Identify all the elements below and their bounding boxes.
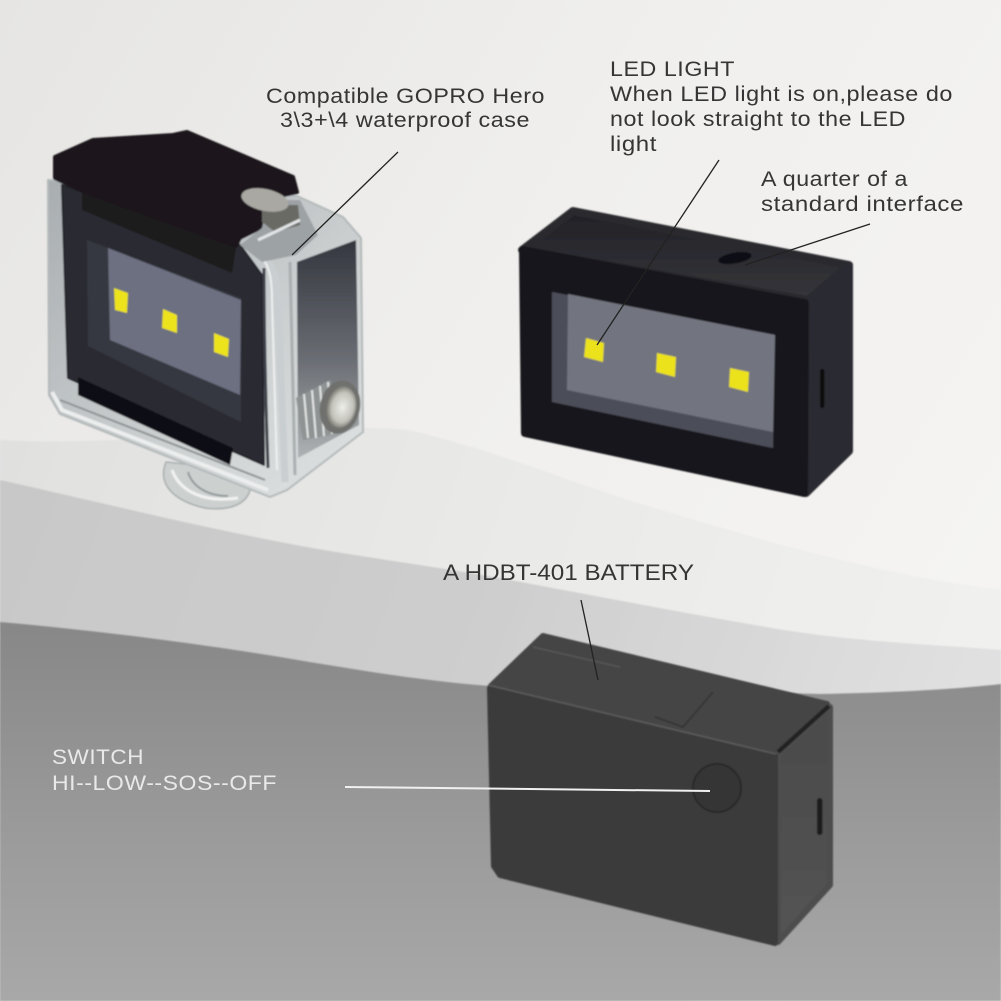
icon: led 3 [214, 333, 229, 357]
edge highlight [488, 685, 776, 754]
light panel [108, 248, 241, 395]
label: quarter interface: standard interface [761, 193, 964, 216]
clear housing [48, 180, 363, 497]
front dark body [62, 185, 264, 465]
label: compatible case [266, 85, 545, 132]
leader line: quarter interface [745, 224, 870, 265]
leader line: led [597, 160, 719, 345]
side button [296, 376, 365, 440]
icon: switch button [693, 764, 741, 812]
label: led light [610, 58, 953, 156]
icon: led 1 [584, 338, 604, 362]
leader line: case [292, 152, 398, 255]
icon: mounting foot [164, 462, 250, 509]
panel surround [87, 240, 241, 422]
label: led light: not look straight to the LED [610, 108, 906, 131]
top face [522, 211, 849, 300]
label: compatible case: 3\3+\4 waterproof case [280, 109, 530, 132]
product: waterproof case with LED light [48, 132, 365, 509]
icon: led 3 [729, 368, 749, 392]
right face [806, 266, 849, 493]
front face [523, 250, 805, 493]
label: switch: HI--LOW--SOS--OFF [52, 772, 277, 795]
label: led light: light [610, 133, 657, 156]
screen surround [552, 292, 775, 448]
product: battery unit [488, 636, 830, 943]
label: compatible case: Compatible GOPRO Hero [266, 85, 545, 108]
icon: led 1 [114, 288, 128, 313]
label: switch: SWITCH [52, 746, 144, 769]
top latch [239, 184, 318, 262]
label: led light: When LED light is on,please do [610, 83, 953, 106]
label: quarter interface [761, 168, 964, 216]
battery tab [655, 692, 713, 727]
ridge line [533, 647, 620, 667]
label: switch [52, 746, 277, 795]
leader line: switch [345, 787, 710, 791]
label: battery: A HDBT-401 BATTERY [443, 560, 694, 585]
gasket rim [250, 248, 285, 482]
right side window [297, 240, 359, 458]
label: quarter interface: A quarter of a [761, 168, 908, 191]
icon: quarter thread hole [717, 250, 753, 266]
icon: side slot [820, 369, 824, 408]
right face [778, 707, 830, 942]
label: led light: LED LIGHT [610, 58, 735, 81]
icon: led 2 [656, 353, 676, 377]
bottom strip [78, 377, 233, 465]
top face [491, 636, 827, 752]
leader line: battery [581, 600, 598, 680]
black cap [55, 132, 297, 246]
top strip [82, 192, 236, 273]
dark corner edge [778, 706, 829, 752]
icon: side slot [817, 798, 822, 835]
product: bare LED unit [522, 211, 849, 493]
icon: led 2 [162, 309, 177, 333]
lower rim highlight [52, 392, 268, 490]
front face [490, 688, 775, 943]
light panel [567, 294, 775, 432]
